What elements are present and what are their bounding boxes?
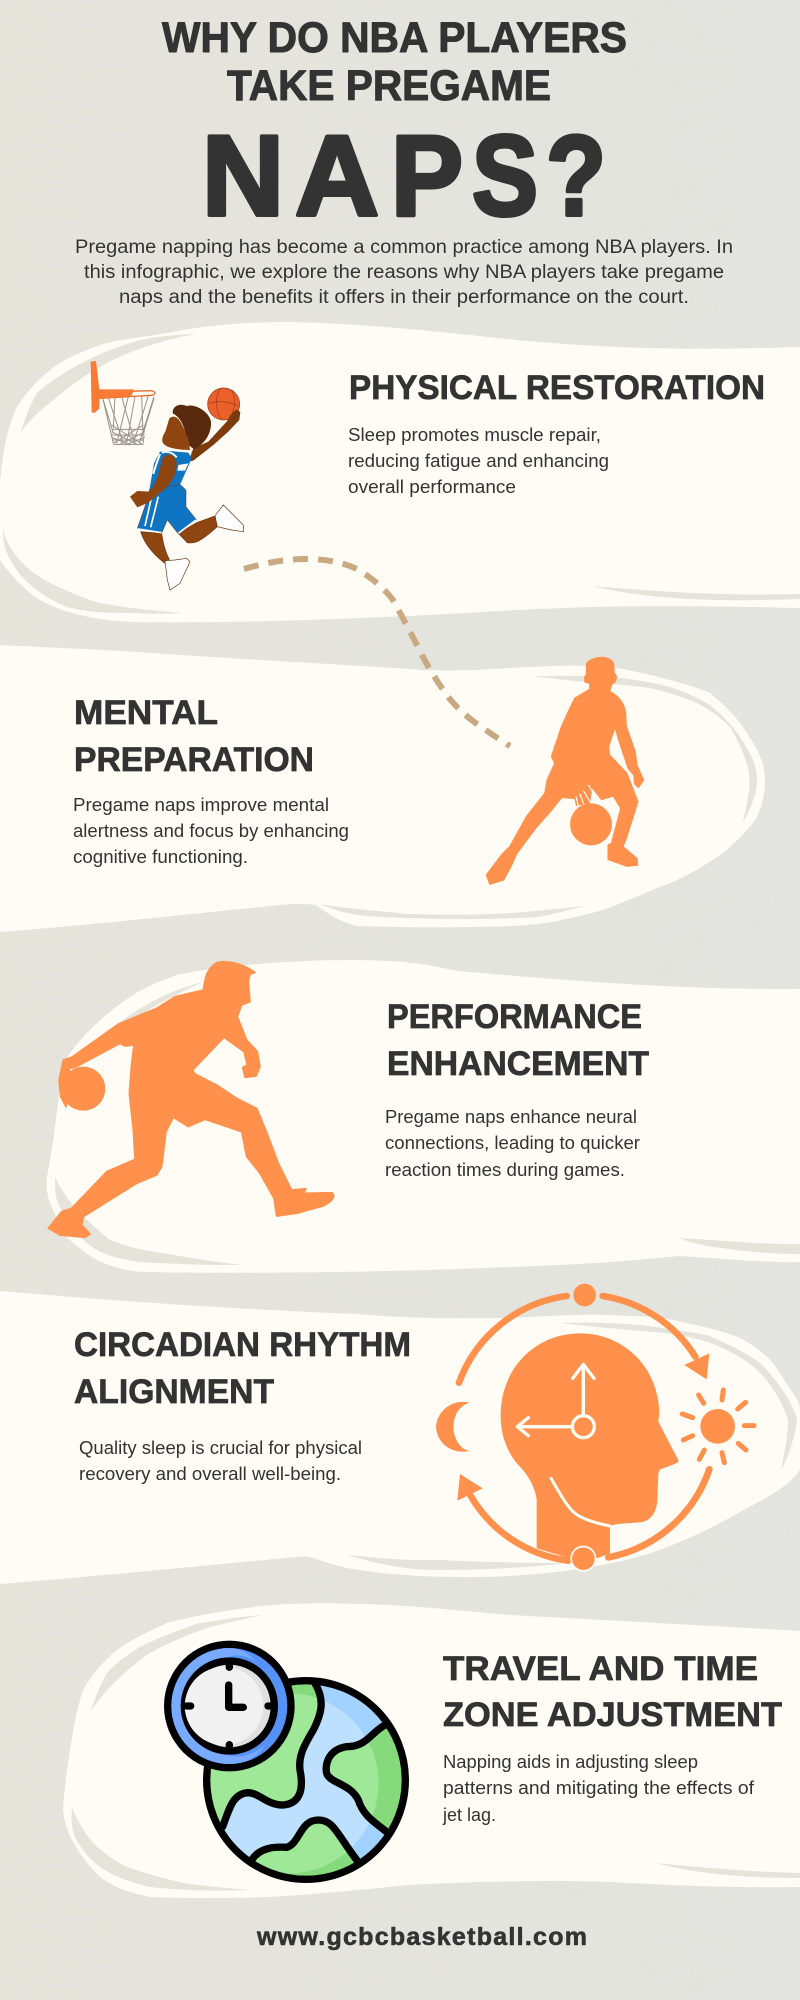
head jaw line <box>551 1478 610 1526</box>
heading: travel and time zone adjustment <box>443 1650 782 1734</box>
bottom node <box>572 1547 595 1570</box>
left arm <box>130 455 177 507</box>
heading: performance enhancement <box>387 998 649 1083</box>
panel 3 cream blob <box>47 960 800 1273</box>
cycle arcs <box>459 1296 709 1561</box>
body text: travel and time zone adjustment: Napping aids in adjusting sleep <box>443 1751 698 1772</box>
panel: travel and time zone adjustment <box>63 1603 800 1907</box>
title <box>162 14 627 240</box>
silhouette: player dribbling, facing forward <box>487 658 643 884</box>
head <box>501 1333 678 1558</box>
body text: performance enhancement <box>385 1106 640 1180</box>
heading: circadian rhythm alignment: ALIGNMENT <box>74 1373 274 1411</box>
heading: mental preparation: MENTAL <box>74 694 218 732</box>
heading: mental preparation <box>74 694 314 779</box>
front leg <box>141 532 169 563</box>
silhouette: player driving with ball <box>48 962 334 1237</box>
heading: mental preparation: PREPARATION <box>74 741 314 779</box>
panel: performance enhancement <box>47 960 800 1273</box>
body text: mental preparation <box>73 794 349 867</box>
shoes <box>165 505 243 590</box>
icon: globe and clock <box>164 1640 409 1883</box>
dashed path arrow <box>244 559 510 746</box>
heading: circadian rhythm alignment: CIRCADIAN RHYTHM <box>74 1326 411 1364</box>
moon <box>436 1402 469 1452</box>
title line 1: WHY DO NBA PLAYERS <box>162 14 627 62</box>
body text: performance enhancement: reaction times during games. <box>385 1159 625 1180</box>
panel 1 cream blob <box>0 322 800 622</box>
body text: physical restoration: reducing fatigue and enhancing <box>348 450 609 471</box>
body text: performance enhancement: connections, leading to quicker <box>385 1132 640 1153</box>
ball <box>208 388 240 420</box>
title line 2: TAKE PREGAME <box>227 62 551 110</box>
intro paragraph <box>75 237 733 308</box>
top node <box>573 1284 596 1306</box>
hair <box>173 405 211 449</box>
raised arm <box>188 409 240 462</box>
title: NAPS?: A <box>295 113 379 240</box>
footer website: www.gcbcbasketball.com <box>256 1923 587 1951</box>
title: NAPS? <box>202 113 606 240</box>
intro paragraph: this infographic, we explore the reasons why NBA players take pregame <box>84 262 724 283</box>
back leg <box>178 516 217 543</box>
icon: head with clock and day-night cycle <box>436 1284 754 1570</box>
clock <box>164 1641 295 1771</box>
panel 5 cream blob <box>63 1603 800 1898</box>
panel: physical restoration <box>0 322 800 622</box>
heading: physical restoration: PHYSICAL RESTORATION <box>349 369 765 407</box>
intro paragraph: naps and the benefits it offers in their performance on the court. <box>119 287 689 308</box>
jersey <box>149 451 192 490</box>
panel: circadian rhythm alignment <box>0 1284 800 1584</box>
body text: travel and time zone adjustment <box>442 1751 755 1825</box>
title: NAPS?: P <box>391 113 463 240</box>
body text: physical restoration <box>348 424 609 497</box>
body text: mental preparation: alertness and focus by enhancing <box>73 820 349 841</box>
body text: travel and time zone adjustment: patterns and mitigating the effects of <box>443 1777 755 1798</box>
illustration: player dunking <box>91 361 243 590</box>
body text: circadian rhythm alignment: recovery and overall well-being. <box>79 1463 341 1484</box>
clock hands <box>517 1364 594 1438</box>
net <box>103 396 154 445</box>
face <box>162 417 190 450</box>
title: NAPS?: N <box>202 113 284 240</box>
body text: mental preparation: Pregame naps improve mental <box>73 794 329 815</box>
body text: physical restoration: overall performance <box>348 476 516 497</box>
panel: mental preparation <box>0 645 765 932</box>
sun <box>682 1390 754 1463</box>
globe <box>203 1677 409 1883</box>
body text: circadian rhythm alignment: Quality sleep is crucial for physical <box>79 1437 362 1458</box>
heading: circadian rhythm alignment <box>74 1326 411 1411</box>
cycle arrowheads <box>457 1353 709 1501</box>
body text: performance enhancement: Pregame naps enhance neural <box>385 1106 637 1127</box>
heading: travel and time zone adjustment: ZONE ADJUSTMENT <box>443 1696 782 1734</box>
title: NAPS?: ? <box>546 113 606 240</box>
heading: performance enhancement: PERFORMANCE <box>387 998 642 1036</box>
heading: travel and time zone adjustment: TRAVEL AND TIME <box>443 1650 758 1688</box>
panel 4 cream blob <box>0 1291 800 1584</box>
panel 2 cream blob <box>0 645 765 932</box>
body text: mental preparation: cognitive functioning. <box>73 846 248 867</box>
title: NAPS?: S <box>472 113 538 240</box>
body text: physical restoration: Sleep promotes muscle repair, <box>348 424 601 445</box>
shorts <box>137 484 197 534</box>
body text: travel and time zone adjustment: jet lag. <box>442 1804 496 1825</box>
heading: performance enhancement: ENHANCEMENT <box>387 1045 649 1083</box>
body text: circadian rhythm alignment <box>79 1437 362 1484</box>
intro paragraph: Pregame napping has become a common practice among NBA players. In <box>75 237 733 258</box>
